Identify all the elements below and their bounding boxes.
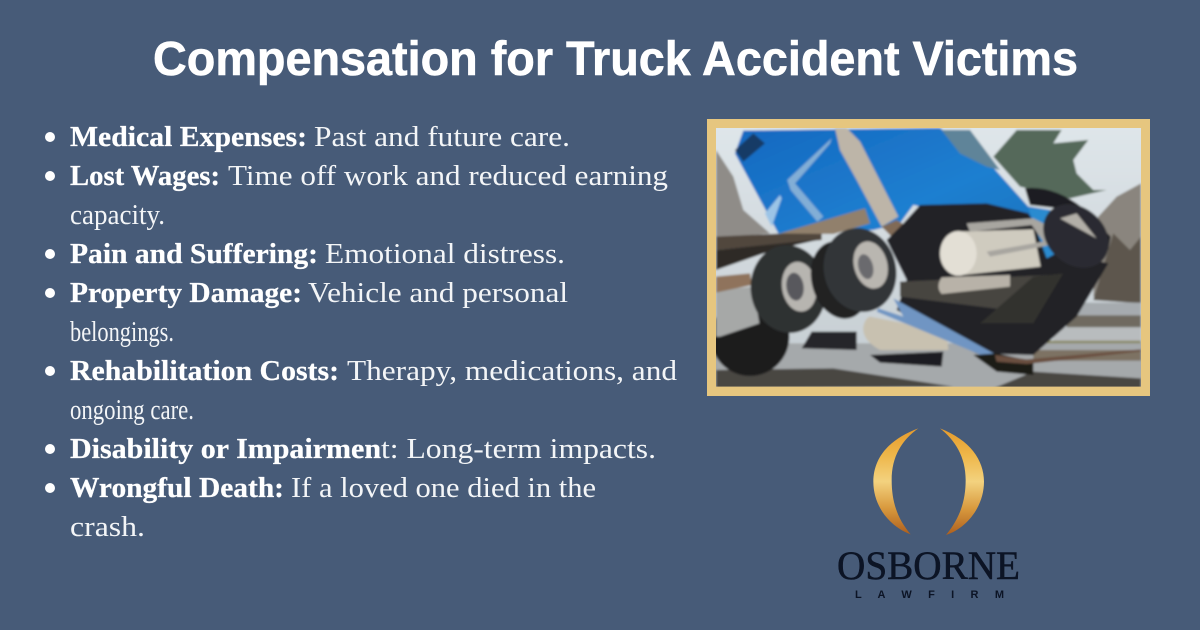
bullet: disability or impairment xyxy=(45,433,656,465)
bullet: wrongful death: crash. xyxy=(70,511,145,543)
bullet: lost wages xyxy=(45,160,668,231)
framed photo: overturned blue truck xyxy=(707,119,1150,396)
bullet: pain and suffering: Emotional distress. xyxy=(325,238,565,270)
front wheel xyxy=(1025,188,1111,250)
bullet: rehabilitation costs: Rehabilitation Costs: xyxy=(70,355,339,387)
bullet: property damage: Vehicle and personal xyxy=(308,277,568,309)
logo wordmark: OSBORNE xyxy=(837,543,1020,588)
title: Compensation for Truck Accident Victims xyxy=(153,33,1078,86)
engine bay xyxy=(887,203,1108,355)
frame rail xyxy=(780,208,870,234)
bullet: pain and suffering xyxy=(45,238,565,270)
bullet: medical expenses: Past and future care. xyxy=(314,121,570,153)
bullet: rehabilitation costs xyxy=(45,355,678,426)
tow chain and bumper xyxy=(973,353,1033,375)
bullet: pain and suffering: Pain and Suffering: xyxy=(70,238,318,270)
flatbed rail xyxy=(716,232,822,250)
fuel tank xyxy=(940,229,1041,276)
bullet: lost wages: Lost Wages: xyxy=(70,160,220,192)
lower tank xyxy=(863,317,948,350)
bullet: wrongful death: If a loved one died in the xyxy=(291,472,596,504)
logo mark: gold crescents xyxy=(873,428,984,535)
sky xyxy=(716,128,1141,345)
distant trees xyxy=(716,150,770,238)
exhaust stack xyxy=(835,128,898,227)
bullet: lost wages: Time off work and reduced earning xyxy=(228,160,668,192)
bullet: disability or impairment: t: Long-term impacts. xyxy=(381,433,656,465)
rear wheel left xyxy=(749,244,825,334)
rear wheel right xyxy=(810,240,861,320)
bullet: medical expenses: Medical Expenses: xyxy=(70,121,307,153)
cab windows xyxy=(942,130,1000,170)
bullet: property damage xyxy=(45,277,568,348)
bullet: rehabilitation costs: Therapy, medications, and xyxy=(347,355,678,387)
second tank xyxy=(938,275,1010,294)
rear lower wheel xyxy=(716,312,791,377)
bullet: wrongful death: Wrongful Death: xyxy=(70,472,284,504)
bullet: medical expenses xyxy=(45,121,570,153)
bullet: property damage: Property Damage: xyxy=(70,277,302,309)
logo tagline: L A W F I R M xyxy=(855,589,1004,601)
blue straps xyxy=(877,298,997,360)
mud flap xyxy=(716,287,759,337)
bullet: lost wages: capacity. xyxy=(70,199,165,231)
blue fender xyxy=(1028,208,1056,258)
guardrail and road xyxy=(1073,303,1141,315)
bullet: wrongful death xyxy=(45,472,596,543)
bullet: property damage: belongings. xyxy=(70,316,174,348)
logo: Osborne Law Firm xyxy=(837,428,1020,601)
pine tree xyxy=(993,130,1107,198)
bullet: rehabilitation costs: ongoing care. xyxy=(70,394,194,426)
steps xyxy=(802,332,857,350)
bullet list: compensation types xyxy=(45,121,678,543)
bullet: disability or impairment: Disability or Impairmen xyxy=(70,433,381,465)
truck cab xyxy=(734,128,1052,236)
